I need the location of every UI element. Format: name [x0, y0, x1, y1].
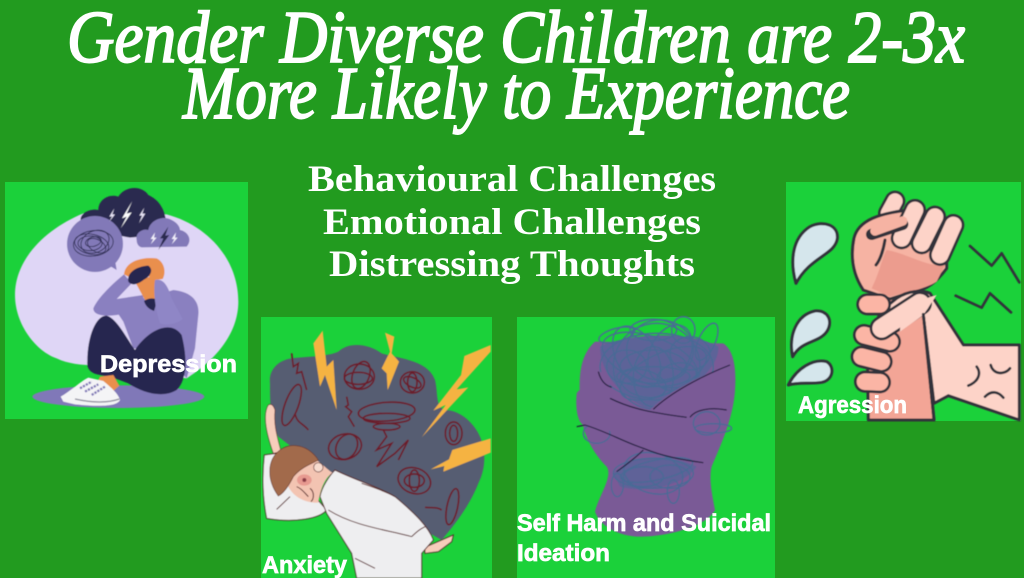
- subheading: challenges list: [308, 159, 716, 285]
- illustration: depressed man under storm clouds: [15, 188, 238, 408]
- subheading: challenges list: Behavioural Challenges: [308, 159, 716, 200]
- label: self harm and suicidal ideation: [517, 510, 771, 567]
- subheading: challenges list: Emotional Challenges: [323, 202, 701, 243]
- label: depression: Depression: [100, 351, 237, 378]
- label: self harm and suicidal ideation: Ideation: [517, 540, 610, 567]
- subheading: challenges list: Distressing Thoughts: [329, 244, 695, 285]
- title: [67, 0, 965, 135]
- label: self harm and suicidal ideation: Self Harm and Suicidal: [517, 510, 771, 537]
- title: More Likely to Experience: [182, 53, 850, 135]
- panel: anxiety: [261, 317, 492, 578]
- panel: depression: [5, 182, 248, 419]
- illustration: hand gripping a clenched fist's wrist: [788, 201, 1019, 420]
- illustration: man carrying storm cloud: [263, 331, 491, 578]
- panel: aggression: [786, 182, 1021, 421]
- illustration: figure hugging itself with tangled scribble: [576, 317, 735, 537]
- panel: self harm and suicidal ideation: [517, 317, 775, 578]
- label: aggression: Agression: [798, 392, 907, 419]
